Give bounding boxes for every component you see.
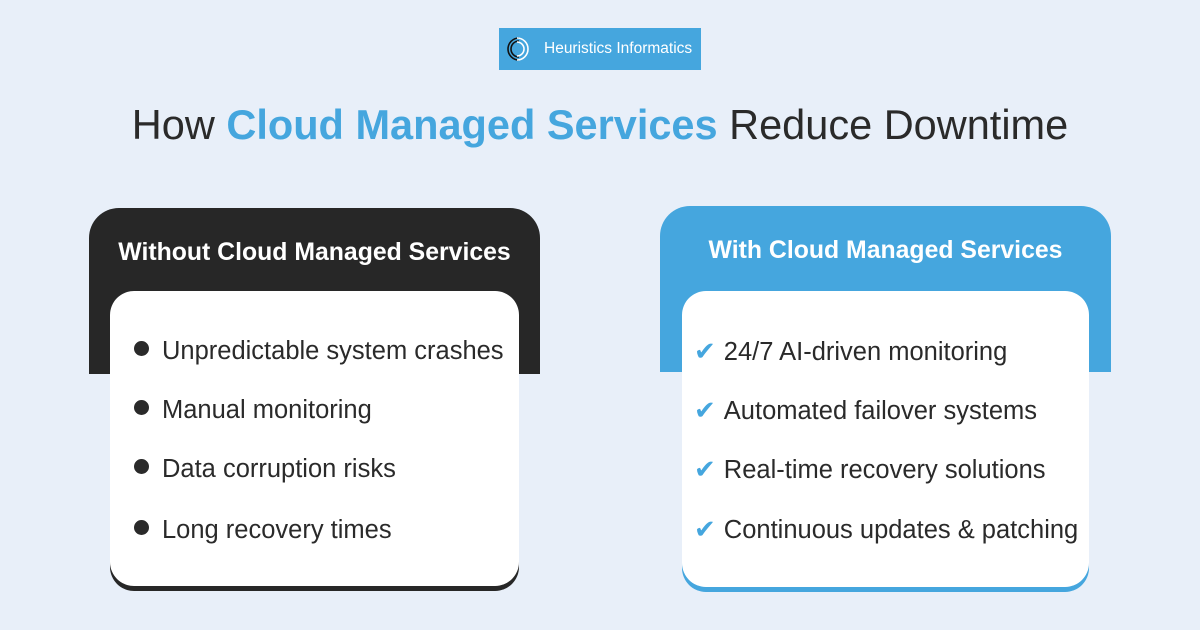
- item: ✔: [694, 336, 716, 366]
- item: Automated failover systems: [724, 397, 1037, 425]
- logo text: Heuristics Informatics: [544, 40, 692, 57]
- item: Long recovery times: [162, 516, 392, 544]
- item: Real-time recovery solutions: [724, 456, 1046, 484]
- panel: with: [660, 206, 1111, 592]
- item: Manual monitoring: [162, 396, 372, 424]
- title: How Cloud Managed Services Reduce Downtime: [132, 101, 1068, 148]
- panel: without: [89, 208, 540, 591]
- icon: logo rings: [507, 37, 529, 61]
- item: 24/7 AI-driven monitoring: [724, 338, 1007, 366]
- card: without list: [110, 291, 519, 586]
- card: with list: [682, 291, 1089, 587]
- heading: with: With Cloud Managed Services: [709, 237, 1062, 264]
- item: Data corruption risks: [162, 455, 396, 483]
- item: ✔: [694, 395, 716, 425]
- heading: with: [660, 206, 1111, 372]
- heading: without: Without Cloud Managed Services: [118, 239, 511, 266]
- heading: without: [89, 208, 540, 374]
- item: Unpredictable system crashes: [162, 337, 504, 365]
- item: Continuous updates & patching: [724, 516, 1078, 544]
- item: ✔: [694, 514, 716, 544]
- logo: [499, 28, 701, 70]
- item: ✔: [694, 454, 716, 484]
